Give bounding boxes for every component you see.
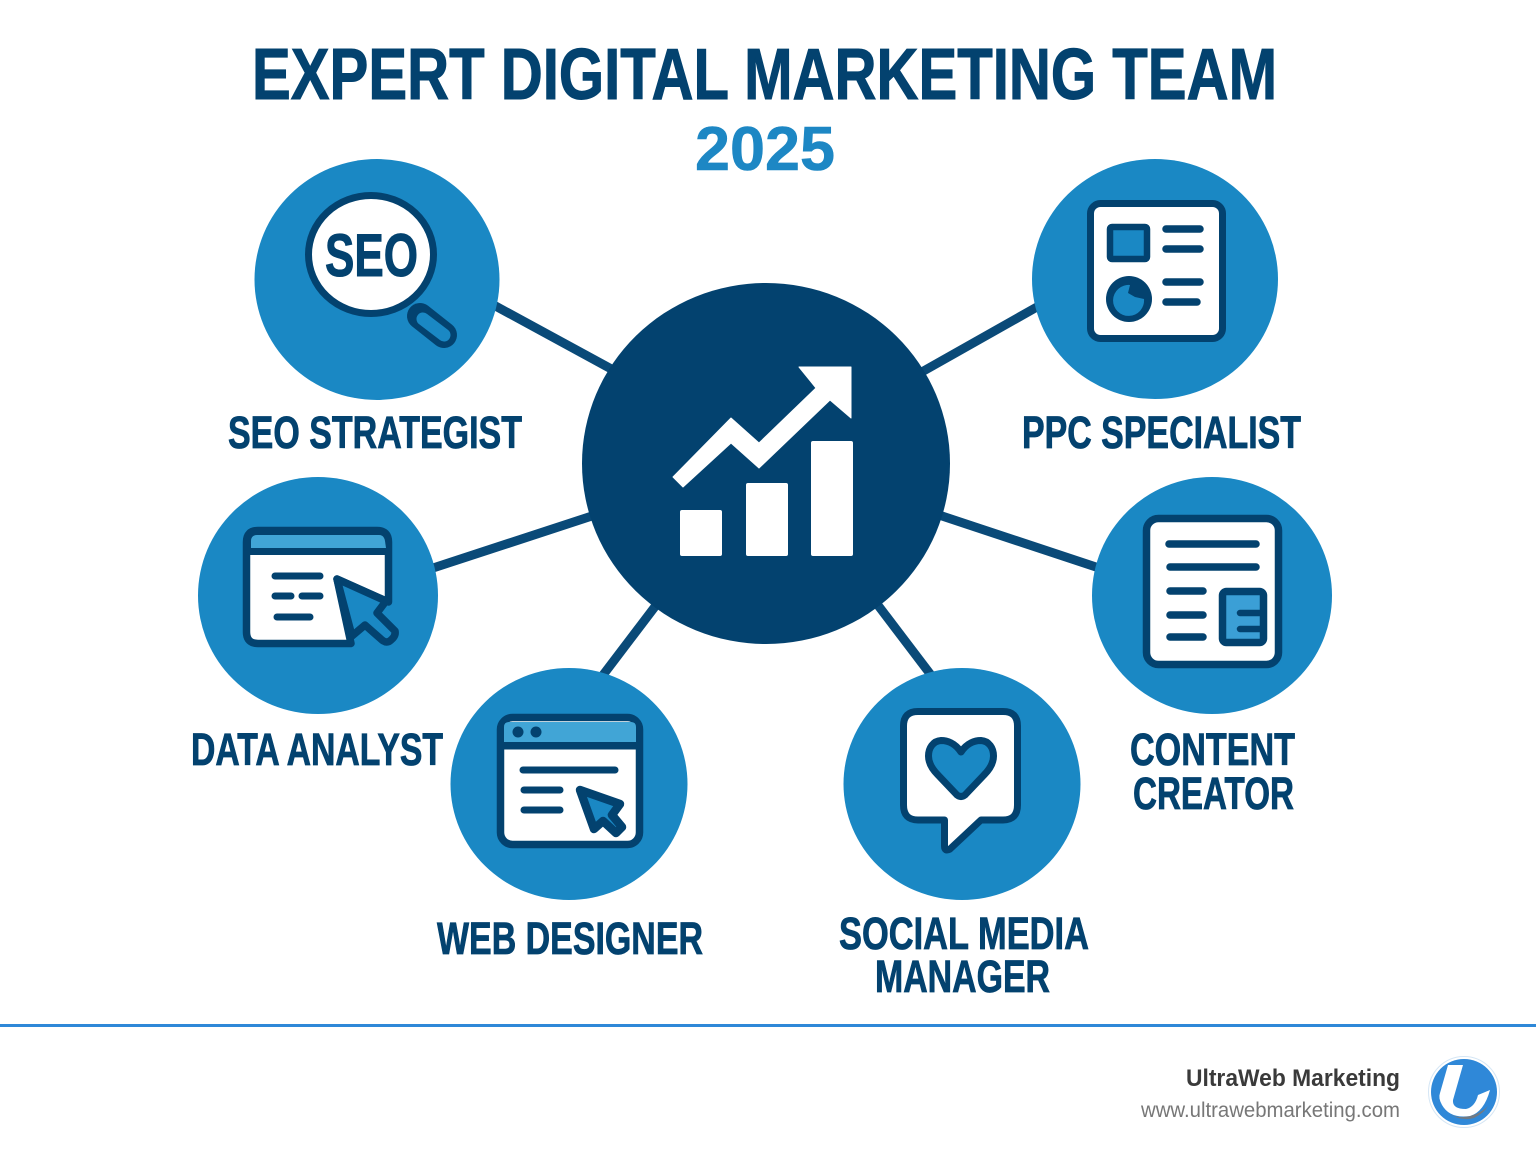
icon: browser window with cursor — [246, 530, 395, 644]
label — [1130, 724, 1295, 819]
label: MANAGER — [875, 951, 1050, 1002]
connector lines — [430, 303, 1102, 679]
footer: website: www.ultrawebmarketing.com — [1140, 1099, 1400, 1122]
icon: brand logo — [1428, 1056, 1500, 1128]
label — [839, 908, 1089, 1002]
label: SOCIAL MEDIA — [839, 908, 1089, 959]
subtitle: year: 2025 — [695, 115, 835, 184]
icon: magnifying glass — [308, 196, 444, 335]
icon: website window with cursor — [500, 718, 640, 844]
footer: brand name: UltraWeb Marketing — [1186, 1065, 1400, 1092]
panel: web designer — [437, 668, 703, 964]
panel: content creator — [1092, 477, 1332, 819]
title: EXPERT DIGITAL MARKETING TEAM — [252, 35, 1277, 115]
icon: ad report — [1090, 204, 1222, 338]
label: CONTENT — [1130, 724, 1295, 775]
icon: rising bars — [680, 441, 853, 556]
icon: growth arrow — [673, 367, 851, 487]
label: WEB DESIGNER — [437, 913, 703, 964]
label: PPC SPECIALIST — [1022, 407, 1301, 458]
icon: magnifying glass: SEO — [325, 222, 418, 289]
label: SEO STRATEGIST — [228, 407, 522, 458]
icon: speech bubble with heart — [904, 712, 1018, 850]
panel: SEO strategist — [228, 159, 522, 458]
footer divider — [0, 1024, 1536, 1027]
central hub: growth chart — [582, 283, 950, 644]
label: DATA ANALYST — [191, 724, 443, 775]
label: CREATOR — [1133, 768, 1294, 819]
panel: PPC specialist — [1022, 159, 1301, 458]
panel: data analyst — [191, 477, 443, 775]
panel: social media manager — [839, 668, 1089, 1002]
icon: document — [1146, 518, 1278, 664]
